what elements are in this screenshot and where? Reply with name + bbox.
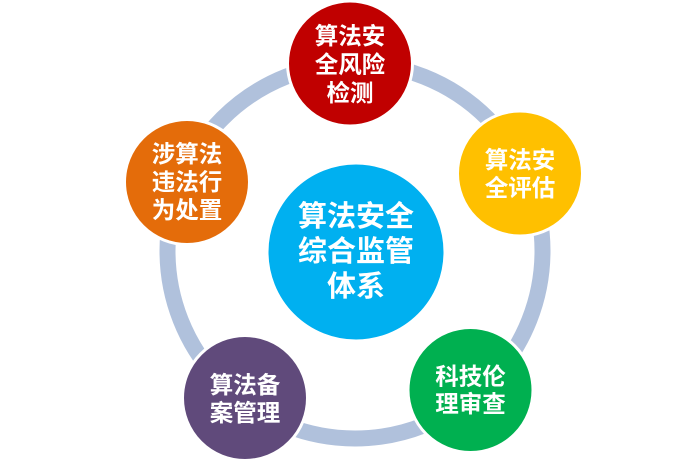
node: 算法备案管理: 算法备 [210, 372, 281, 398]
node: 科技伦理审查 [408, 328, 533, 452]
node: 算法安全评估 [458, 111, 582, 236]
node: 科技伦理审查: 科技伦 [435, 364, 506, 390]
node: 涉算法违法行为处置: 为处置 [152, 197, 222, 223]
node: 算法安全风险检测: 全风险 [315, 52, 386, 78]
node: 算法安全风险检测 [288, 1, 412, 126]
node: 涉算法违法行为处置: 违法行 [152, 169, 222, 195]
node: 涉算法违法行为处置 [124, 120, 250, 244]
center circle: 算法安全综合监管体系: 综合监管 [298, 235, 414, 268]
node: 算法安全评估: 算法安 [485, 147, 555, 173]
ring connecting the five nodes [168, 64, 542, 438]
node: 算法安全评估: 全评估 [485, 175, 555, 201]
center circle: 算法安全综合监管体系 [268, 164, 444, 340]
center circle: 算法安全综合监管体系: 体系 [327, 270, 385, 303]
node: 算法备案管理 [182, 336, 308, 460]
node: 涉算法违法行为处置: 涉算法 [152, 141, 222, 167]
node: 算法安全风险检测: 算法安 [315, 23, 385, 49]
center circle: 算法安全综合监管体系: 算法安全 [298, 200, 414, 233]
node: 算法备案管理: 案管理 [210, 400, 280, 426]
node: 算法安全风险检测: 检测 [326, 79, 374, 106]
node: 科技伦理审查: 理审查 [435, 391, 506, 417]
